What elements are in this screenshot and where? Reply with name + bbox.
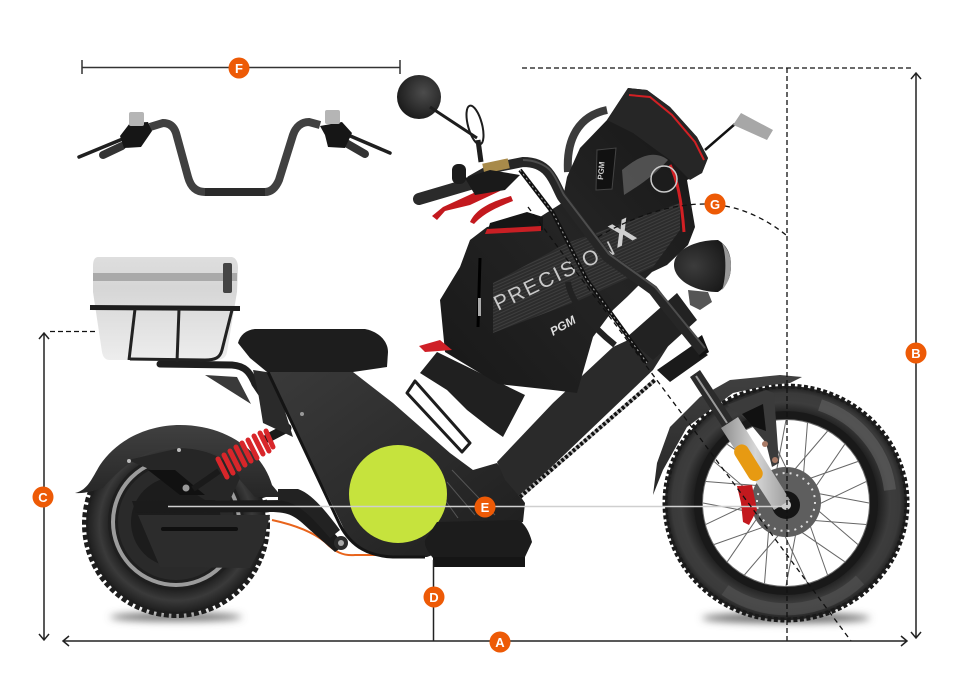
zip pull bbox=[478, 298, 481, 316]
dimension E bbox=[168, 496, 782, 518]
footrest bbox=[425, 520, 532, 567]
golf bag bbox=[407, 88, 773, 452]
bag tag bbox=[596, 148, 616, 190]
dimension F: F bbox=[235, 61, 243, 76]
golf club bbox=[705, 113, 773, 150]
golf bag: PGM bbox=[548, 312, 579, 339]
tag label: PGM bbox=[596, 161, 607, 180]
dimension A bbox=[63, 632, 907, 652]
dimension E: E bbox=[481, 500, 490, 515]
handlebar on bike bbox=[419, 158, 705, 363]
rear shock absorber bbox=[193, 428, 287, 489]
dimension D: D bbox=[429, 590, 439, 605]
brand text: PRECISION bbox=[490, 236, 620, 315]
bag ring bbox=[651, 166, 677, 192]
dimension G and diagonal: G bbox=[710, 197, 720, 212]
dimension F bbox=[82, 58, 400, 78]
front wheel bbox=[665, 386, 907, 620]
golf bag: X bbox=[604, 211, 641, 255]
rear wheel bbox=[85, 433, 267, 615]
dimension G and diagonal bbox=[528, 194, 851, 641]
green circle bbox=[349, 445, 447, 543]
braided cable bbox=[520, 170, 647, 363]
bag collar bbox=[607, 88, 708, 180]
glossy panel bbox=[622, 155, 668, 195]
side mirrors bbox=[397, 75, 487, 162]
spokes bbox=[702, 419, 870, 587]
side zip bbox=[478, 258, 480, 327]
loose handlebar bbox=[79, 110, 390, 192]
dimension B: B bbox=[911, 346, 921, 361]
top pocket bbox=[487, 212, 543, 233]
headlight bbox=[674, 240, 731, 310]
bag base bbox=[420, 352, 525, 437]
red strap bbox=[419, 340, 452, 352]
orange cable bbox=[272, 520, 377, 555]
bag stand bbox=[407, 381, 470, 452]
red zip pocket bbox=[485, 226, 541, 234]
dimension D bbox=[424, 560, 444, 641]
steering head and clamps bbox=[627, 293, 709, 382]
seat bbox=[238, 329, 388, 372]
dimension C bbox=[32, 332, 95, 640]
red levers bbox=[432, 180, 500, 220]
rear carrier rack bbox=[160, 364, 293, 437]
dimension C: C bbox=[38, 490, 48, 505]
dimension B bbox=[522, 68, 926, 641]
brake caliper bbox=[737, 485, 757, 525]
ground shadows bbox=[110, 613, 870, 623]
bag handle bbox=[568, 110, 607, 172]
dimension A: A bbox=[495, 635, 505, 650]
main frame body bbox=[268, 372, 525, 557]
main tube bbox=[497, 330, 672, 497]
tyre highlights bbox=[820, 405, 890, 490]
rear fender bbox=[75, 425, 282, 500]
front fork bbox=[690, 370, 790, 510]
bag body bbox=[440, 88, 708, 393]
striped pocket bbox=[493, 203, 680, 333]
front fender bbox=[653, 375, 802, 495]
brake disc bbox=[751, 467, 821, 537]
swingarm and chain cover bbox=[132, 489, 348, 568]
top box in basket bbox=[90, 257, 240, 362]
